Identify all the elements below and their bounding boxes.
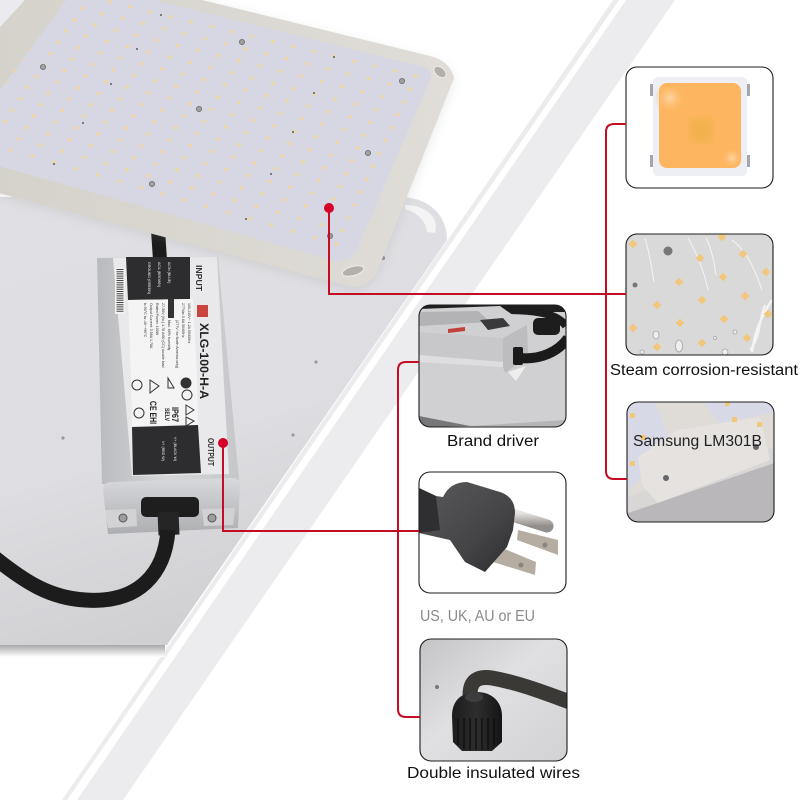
board LEDs [629,233,772,351]
plug round pin [506,513,547,526]
card: LED chip [650,77,750,176]
driver front face [419,332,503,367]
card: double insulated wires [420,639,570,761]
label: plug types: US, UK, AU or EU [420,608,535,625]
label: brand driver: Brand driver [447,433,539,450]
driver end face [503,325,528,373]
input wire text: AC/N (BLUE) [167,262,171,283]
specification panel [128,299,197,378]
plug blade upper [517,530,558,555]
plug cord [419,488,440,533]
chip phosphor [659,83,741,168]
callout: driver connector [218,362,420,717]
water droplets [640,330,737,355]
aluminium back plate [0,197,447,657]
specification text [143,303,191,368]
board screws [632,246,672,288]
light lip [628,447,774,513]
LED grid [0,0,416,244]
callout: panel connector [324,124,627,479]
specification text: Max. 60% humidity [167,320,171,351]
ip rating: SELV [163,408,170,422]
water streaks [645,238,772,352]
card: brand driver photo [419,305,568,427]
driver body [97,257,239,484]
LED driver [97,257,240,534]
ip rating [148,401,180,424]
tab screws [663,444,759,481]
driver foot [508,366,526,381]
card outlines [419,67,774,761]
dark background band [419,416,470,427]
specification text: (277V: for North America only) [175,320,179,368]
small LEDs [630,401,762,466]
card: corner of panel [627,401,774,522]
driver gland [513,347,523,365]
input wire text: AC/L (BROWN) [157,262,161,287]
certification panel [131,378,198,427]
ip rating: IP67 [170,407,180,422]
specification text: Output Current: 3.56A 1.78A [149,303,153,349]
mounting holes [341,64,448,278]
panel frame [0,0,454,287]
chip package [653,77,747,176]
lower plate [628,463,774,522]
specification text: tc:90°C ta:-40~+90°C [143,303,147,338]
label: Samsung LM301B: Samsung LM301B [633,433,762,450]
gland cap [452,692,502,751]
input wire text [147,262,171,294]
card: steam corrosion-resistant board [626,233,773,355]
input cable [158,230,160,260]
input wire text: GROUND (GREEN) [147,262,151,294]
driver label [113,257,229,476]
specification text: 100-240V~ 1.2A 50/60Hz [187,303,191,343]
output heading: OUTPUT [206,438,215,466]
ip rating: CE EHI [148,401,158,424]
board screws [40,39,405,239]
LED panel [0,0,454,291]
label: steam corrosion-resistant: Steam corrosion-resistant [610,362,799,379]
label: double insulated wires: Double insulated wires [407,765,580,782]
frame strip [628,402,774,497]
output cable [0,512,169,600]
wire [470,678,570,702]
input heading: INPUT [194,265,203,291]
output wire text: V+ (RED W) [161,441,165,461]
top cables [419,305,566,335]
left bracket [105,509,137,528]
driver cable [520,338,568,358]
mounting tab [638,417,770,503]
certification marks [132,378,194,426]
plug body [419,482,515,572]
plug hole marks [518,542,548,568]
output wire text: V+ (BLACK W) [173,437,177,461]
red logo [197,305,208,317]
output gland [141,497,199,517]
plug blade lower [494,549,536,575]
end cap [103,478,240,534]
chip die [690,118,712,142]
barcode [115,268,125,314]
diagonal background bands [62,0,675,800]
driver top face [420,306,512,314]
board vias [53,14,335,220]
circuit board [0,0,431,261]
specification text: Rated Power: 100W [155,303,159,336]
chip leads [650,84,750,167]
black input block [126,257,190,300]
screws [119,514,216,522]
output wire text [161,437,177,461]
black output block [132,425,201,475]
right bracket [202,508,235,526]
chip highlights [654,82,743,169]
plate hole [435,685,439,689]
card: power plug [420,482,558,575]
specification text: 277Vac 0.6A 50/60Hz [181,303,185,338]
model name: XLG-100-H-A [197,323,211,399]
specification text: 27-56V (Vo.) 1.78 A/60 (CC) double load [161,303,165,368]
